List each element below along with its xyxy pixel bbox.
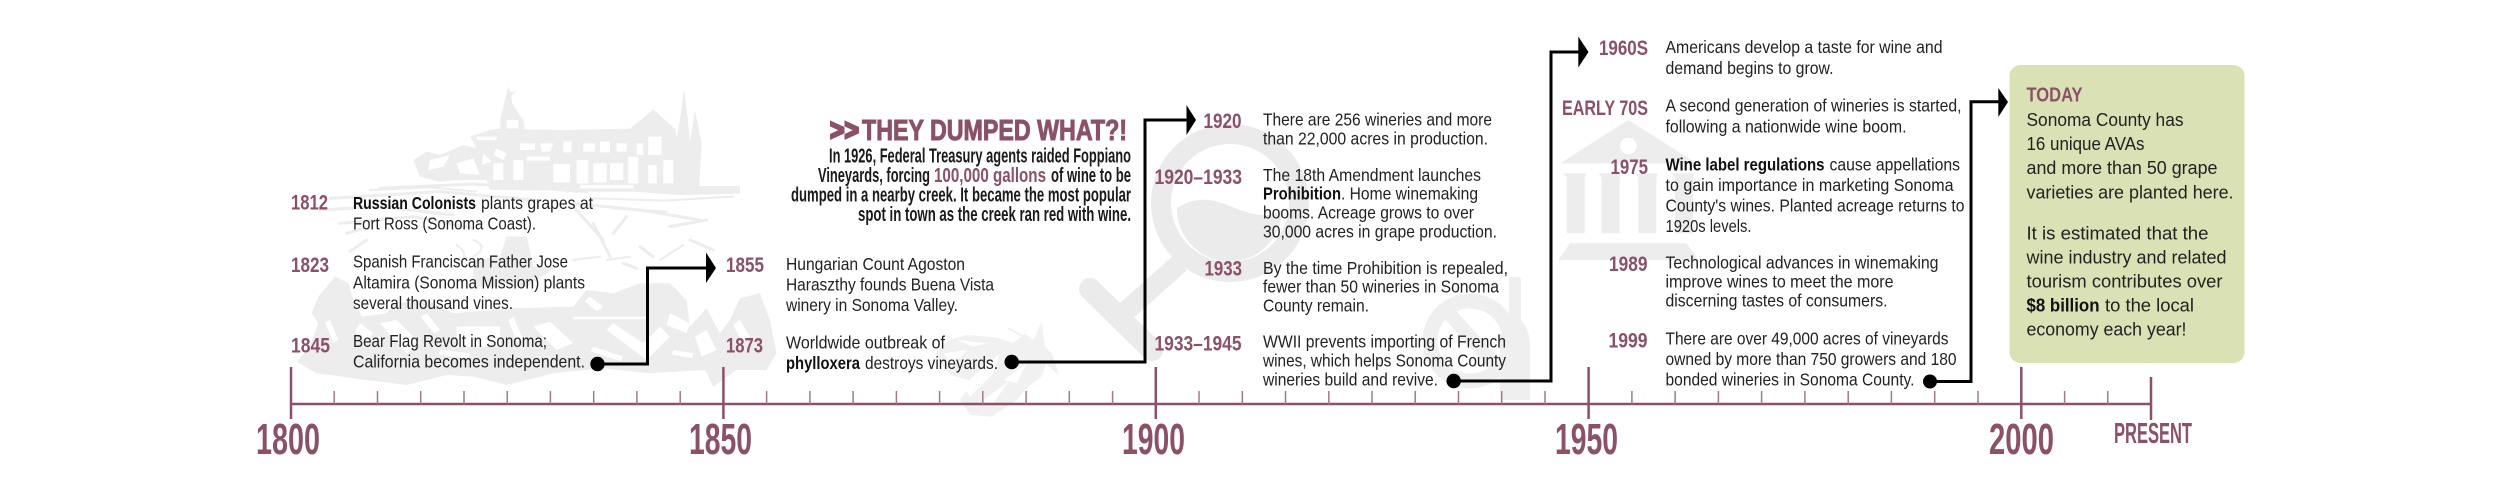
- event 1823: Altamira (Sonoma Mission) plants: [353, 272, 585, 292]
- event 1975: Wine label regulations: [1666, 154, 1825, 174]
- event 1812: plants grapes at: [481, 193, 593, 213]
- today economy: to the local: [2105, 294, 2194, 316]
- events 1960s to 1999: [1562, 37, 1964, 390]
- connector arrow to 1920: [1004, 105, 1196, 369]
- event 1855: [726, 254, 994, 315]
- event 1999: [1608, 328, 1957, 390]
- event 1999: owned by more than 750 growers and 180: [1666, 349, 1957, 369]
- event 1933: County remain.: [1263, 296, 1369, 316]
- callout body: spot in town as the creek ran red with wine.: [858, 204, 1131, 226]
- event 1989: 1989: [1609, 253, 1648, 276]
- event 1920: than 22,000 acres in production.: [1263, 128, 1488, 148]
- event 1855: 1855: [726, 254, 764, 277]
- event 1999: bonded wineries in Sonoma County.: [1666, 370, 1914, 390]
- events 1855 and 1873: [726, 254, 998, 373]
- axis labels: 1800: [256, 415, 320, 464]
- event 1823: Spanish Franciscan Father Jose: [353, 252, 568, 272]
- event 1960s: 1960S: [1599, 37, 1648, 60]
- event 1920-1933: . Home winemaking: [1341, 184, 1478, 204]
- event 1855: winery in Sonoma Valley.: [785, 295, 958, 315]
- event 1975: to gain importance in marketing Sonoma: [1666, 175, 1954, 195]
- callout heading: THEY DUMPED WHAT?!: [862, 115, 1127, 147]
- event 1989: Technological advances in winemaking: [1666, 252, 1938, 272]
- event 1920: 1920: [1204, 110, 1242, 133]
- connector arrow to 1960s: [1446, 36, 1588, 388]
- callout body: of wine to be: [1051, 165, 1131, 187]
- event 1920-1933: 30,000 acres in grape production.: [1263, 222, 1497, 242]
- events 1920 to 1945: [1154, 110, 1508, 390]
- background illustration: magnifying glass with wine: [1090, 134, 1299, 350]
- event 1960s: demand begins to grow.: [1666, 58, 1834, 78]
- event 1873: [726, 332, 998, 373]
- background illustration: phylloxera insect: [935, 322, 1058, 417]
- event 1989: improve wines to meet the more: [1666, 272, 1894, 292]
- event 1975: 1920s levels.: [1666, 216, 1752, 236]
- today facts: varieties are planted here.: [2026, 182, 2234, 202]
- today economy: [2026, 222, 2226, 340]
- event early 70s: A second generation of wineries is started,: [1666, 96, 1962, 116]
- callout body: In 1926, Federal Treasury agents raided Foppiano: [829, 146, 1131, 168]
- callout body: [791, 146, 1131, 226]
- axis labels: 2000: [1989, 415, 2054, 464]
- event 1855: Haraszthy founds Buena Vista: [786, 274, 994, 294]
- event 1933-1945: 1933–1945: [1154, 332, 1242, 356]
- axis labels: PRESENT: [2114, 418, 2192, 450]
- event 1920-1933: Prohibition: [1263, 184, 1341, 204]
- event 1933: fewer than 50 wineries in Sonoma: [1263, 276, 1499, 296]
- event early 70s: [1562, 96, 1962, 136]
- timeline axis: [291, 367, 2151, 420]
- connector arrow to today: [1923, 88, 2008, 388]
- panel: today: [2010, 65, 2244, 363]
- callout: They dumped what: [791, 114, 1131, 226]
- event 1999: There are over 49,000 acres of vineyards: [1666, 328, 1949, 348]
- callout body: dumped in a nearby creek. It became the most popular: [791, 184, 1131, 206]
- event 1823: [291, 252, 585, 313]
- event 1823: several thousand vines.: [353, 293, 513, 313]
- event 1920-1933: [1154, 165, 1497, 242]
- event 1920-1933: booms. Acreage grows to over: [1263, 202, 1474, 222]
- today economy: tourism contributes over: [2026, 270, 2222, 292]
- event 1989: [1609, 252, 1938, 310]
- event 1975: County's wines. Planted acreage returns to: [1666, 196, 1964, 216]
- axis labels: 1850: [689, 415, 752, 464]
- background illustration: winery building: [370, 87, 740, 212]
- today heading: TODAY: [2026, 84, 2083, 106]
- today economy: $8 billion: [2026, 294, 2100, 316]
- connector arrow to 1855: [590, 252, 716, 371]
- callout body: Vineyards, forcing: [818, 165, 930, 187]
- today facts: 16 unique AVAs: [2026, 133, 2144, 154]
- event 1845: California becomes independent.: [353, 352, 585, 372]
- event 1812: Russian Colonists: [353, 193, 476, 213]
- today economy: wine industry and related: [2026, 246, 2226, 268]
- background illustration: prohibited wine bottle: [1430, 277, 1530, 400]
- event 1812: Fort Ross (Sonoma Coast).: [353, 214, 536, 234]
- callout body: 100,000 gallons: [934, 165, 1046, 187]
- event 1933: By the time Prohibition is repealed,: [1263, 258, 1508, 278]
- event early 70s: following a nationwide wine boom.: [1666, 116, 1906, 136]
- today facts: [2026, 109, 2234, 202]
- background illustration: vines and vineyard rows: [320, 184, 713, 287]
- event 1933: 1933: [1204, 258, 1242, 280]
- event 1920-1933: The 18th Amendment launches: [1263, 165, 1481, 185]
- event 1920-1933: 1920–1933: [1154, 166, 1242, 189]
- today economy: economy each year!: [2026, 318, 2186, 340]
- event early 70s: EARLY 70S: [1562, 97, 1648, 120]
- event 1960s: [1599, 37, 1942, 78]
- event 1989: discerning tastes of consumers.: [1666, 290, 1888, 310]
- event 1845: Bear Flag Revolt in Sonoma;: [353, 331, 547, 351]
- event 1920: There are 256 wineries and more: [1263, 110, 1492, 130]
- event 1933-1945: WWII prevents importing of French: [1263, 332, 1506, 352]
- event 1812: [291, 192, 593, 234]
- today facts: Sonoma County has: [2026, 109, 2184, 130]
- event 1873: Worldwide outbreak of: [786, 332, 945, 352]
- event 1845: 1845: [291, 334, 330, 358]
- event 1855: Hungarian Count Agoston: [786, 254, 965, 274]
- event 1873: destroys vineyards.: [865, 353, 998, 373]
- event 1933-1945: wineries build and revive.: [1262, 370, 1438, 390]
- event 1975: [1610, 154, 1964, 236]
- event 1975: 1975: [1610, 156, 1648, 179]
- event 1999: 1999: [1608, 330, 1648, 352]
- event 1975: cause appellations: [1830, 154, 1960, 174]
- axis labels: 1900: [1122, 415, 1185, 464]
- event 1933-1945: wines, which helps Sonoma County: [1262, 350, 1506, 370]
- axis labels: 1950: [1555, 415, 1618, 464]
- event 1933-1945: [1154, 332, 1506, 390]
- event 1873: 1873: [726, 334, 763, 358]
- event 1873: phylloxera: [786, 353, 860, 373]
- event 1960s: Americans develop a taste for wine and: [1666, 37, 1942, 57]
- event 1933: [1204, 258, 1508, 316]
- background illustration: wagon and figures: [297, 277, 777, 387]
- event 1823: 1823: [291, 254, 329, 277]
- background illustration: courthouse building: [1558, 120, 1698, 260]
- event 1812: 1812: [291, 192, 328, 214]
- events 1812 to 1845: [291, 192, 593, 372]
- axis labels: [256, 415, 2192, 464]
- event 1920: [1204, 110, 1492, 148]
- callout heading: >>: [830, 114, 859, 147]
- today economy: It is estimated that the: [2026, 222, 2208, 244]
- today facts: and more than 50 grape: [2026, 157, 2218, 178]
- event 1845: [291, 331, 585, 372]
